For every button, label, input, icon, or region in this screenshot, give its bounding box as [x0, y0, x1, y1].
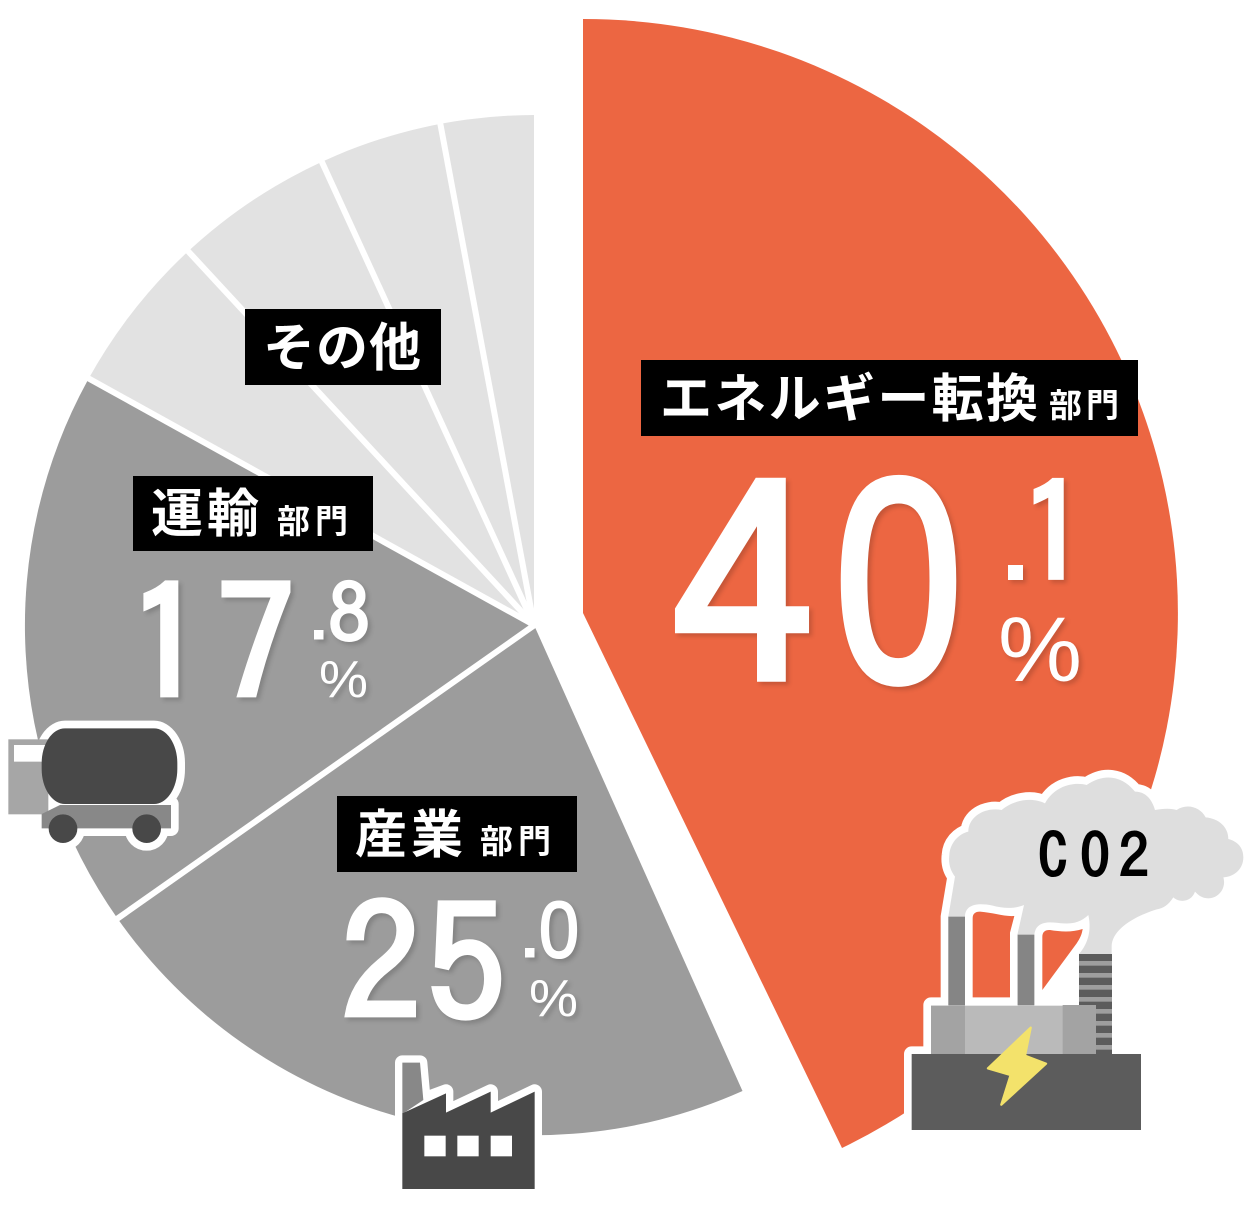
value: 25.0%: 2: [341, 883, 421, 1043]
label: energy conversion sector: エネルギー転換: [660, 371, 1038, 429]
icon: power plant with CO2 cloud: [912, 777, 1243, 1130]
value: 40.1%: %: [998, 599, 1082, 701]
wedge: energy conversion 40.1%: [583, 19, 1178, 1148]
wedge: transport 17.8%: [25, 378, 534, 918]
value: 17.8%: %: [319, 651, 368, 709]
label: transport sector: 部門: [277, 503, 348, 540]
label: energy conversion sector: 部門: [1049, 387, 1119, 424]
value: 17.8%: 8: [329, 573, 369, 653]
label: other sectors: その他: [263, 320, 421, 378]
value: 40.1%: 4: [672, 446, 812, 726]
value: 17.8%: 7: [216, 563, 296, 723]
value: 25.0%: 5: [426, 883, 506, 1043]
value: 25.0%: %: [529, 970, 578, 1028]
label: transport sector: 運輸: [151, 486, 259, 544]
icon: tanker truck: [0, 728, 177, 860]
wedge dividers: [86, 122, 536, 921]
value: 17.8%: [127, 563, 369, 723]
value: 25.0%: [341, 883, 579, 1043]
label: industry sector: 産業: [355, 807, 463, 865]
label: industry sector: 部門: [480, 823, 551, 860]
label: CO2: O: [1080, 826, 1110, 886]
label: transport sector: [133, 476, 373, 551]
icon: factory: [402, 1063, 535, 1189]
value: 25.0%: 0: [539, 885, 579, 974]
value: 40.1%: [672, 420, 1089, 742]
label: energy conversion sector: [641, 360, 1138, 436]
value: 40.1%: 1: [1019, 462, 1089, 602]
label: other sectors: [245, 309, 441, 385]
value: 17.8%: 1: [127, 563, 207, 723]
label: CO2: 2: [1119, 826, 1149, 886]
label: CO2: C: [1038, 826, 1068, 886]
wedges: other sectors: [89, 115, 534, 625]
value: 40.1%: 0: [835, 420, 962, 742]
wedge: industry 25.0%: [118, 625, 742, 1135]
label: industry sector: [337, 796, 577, 872]
